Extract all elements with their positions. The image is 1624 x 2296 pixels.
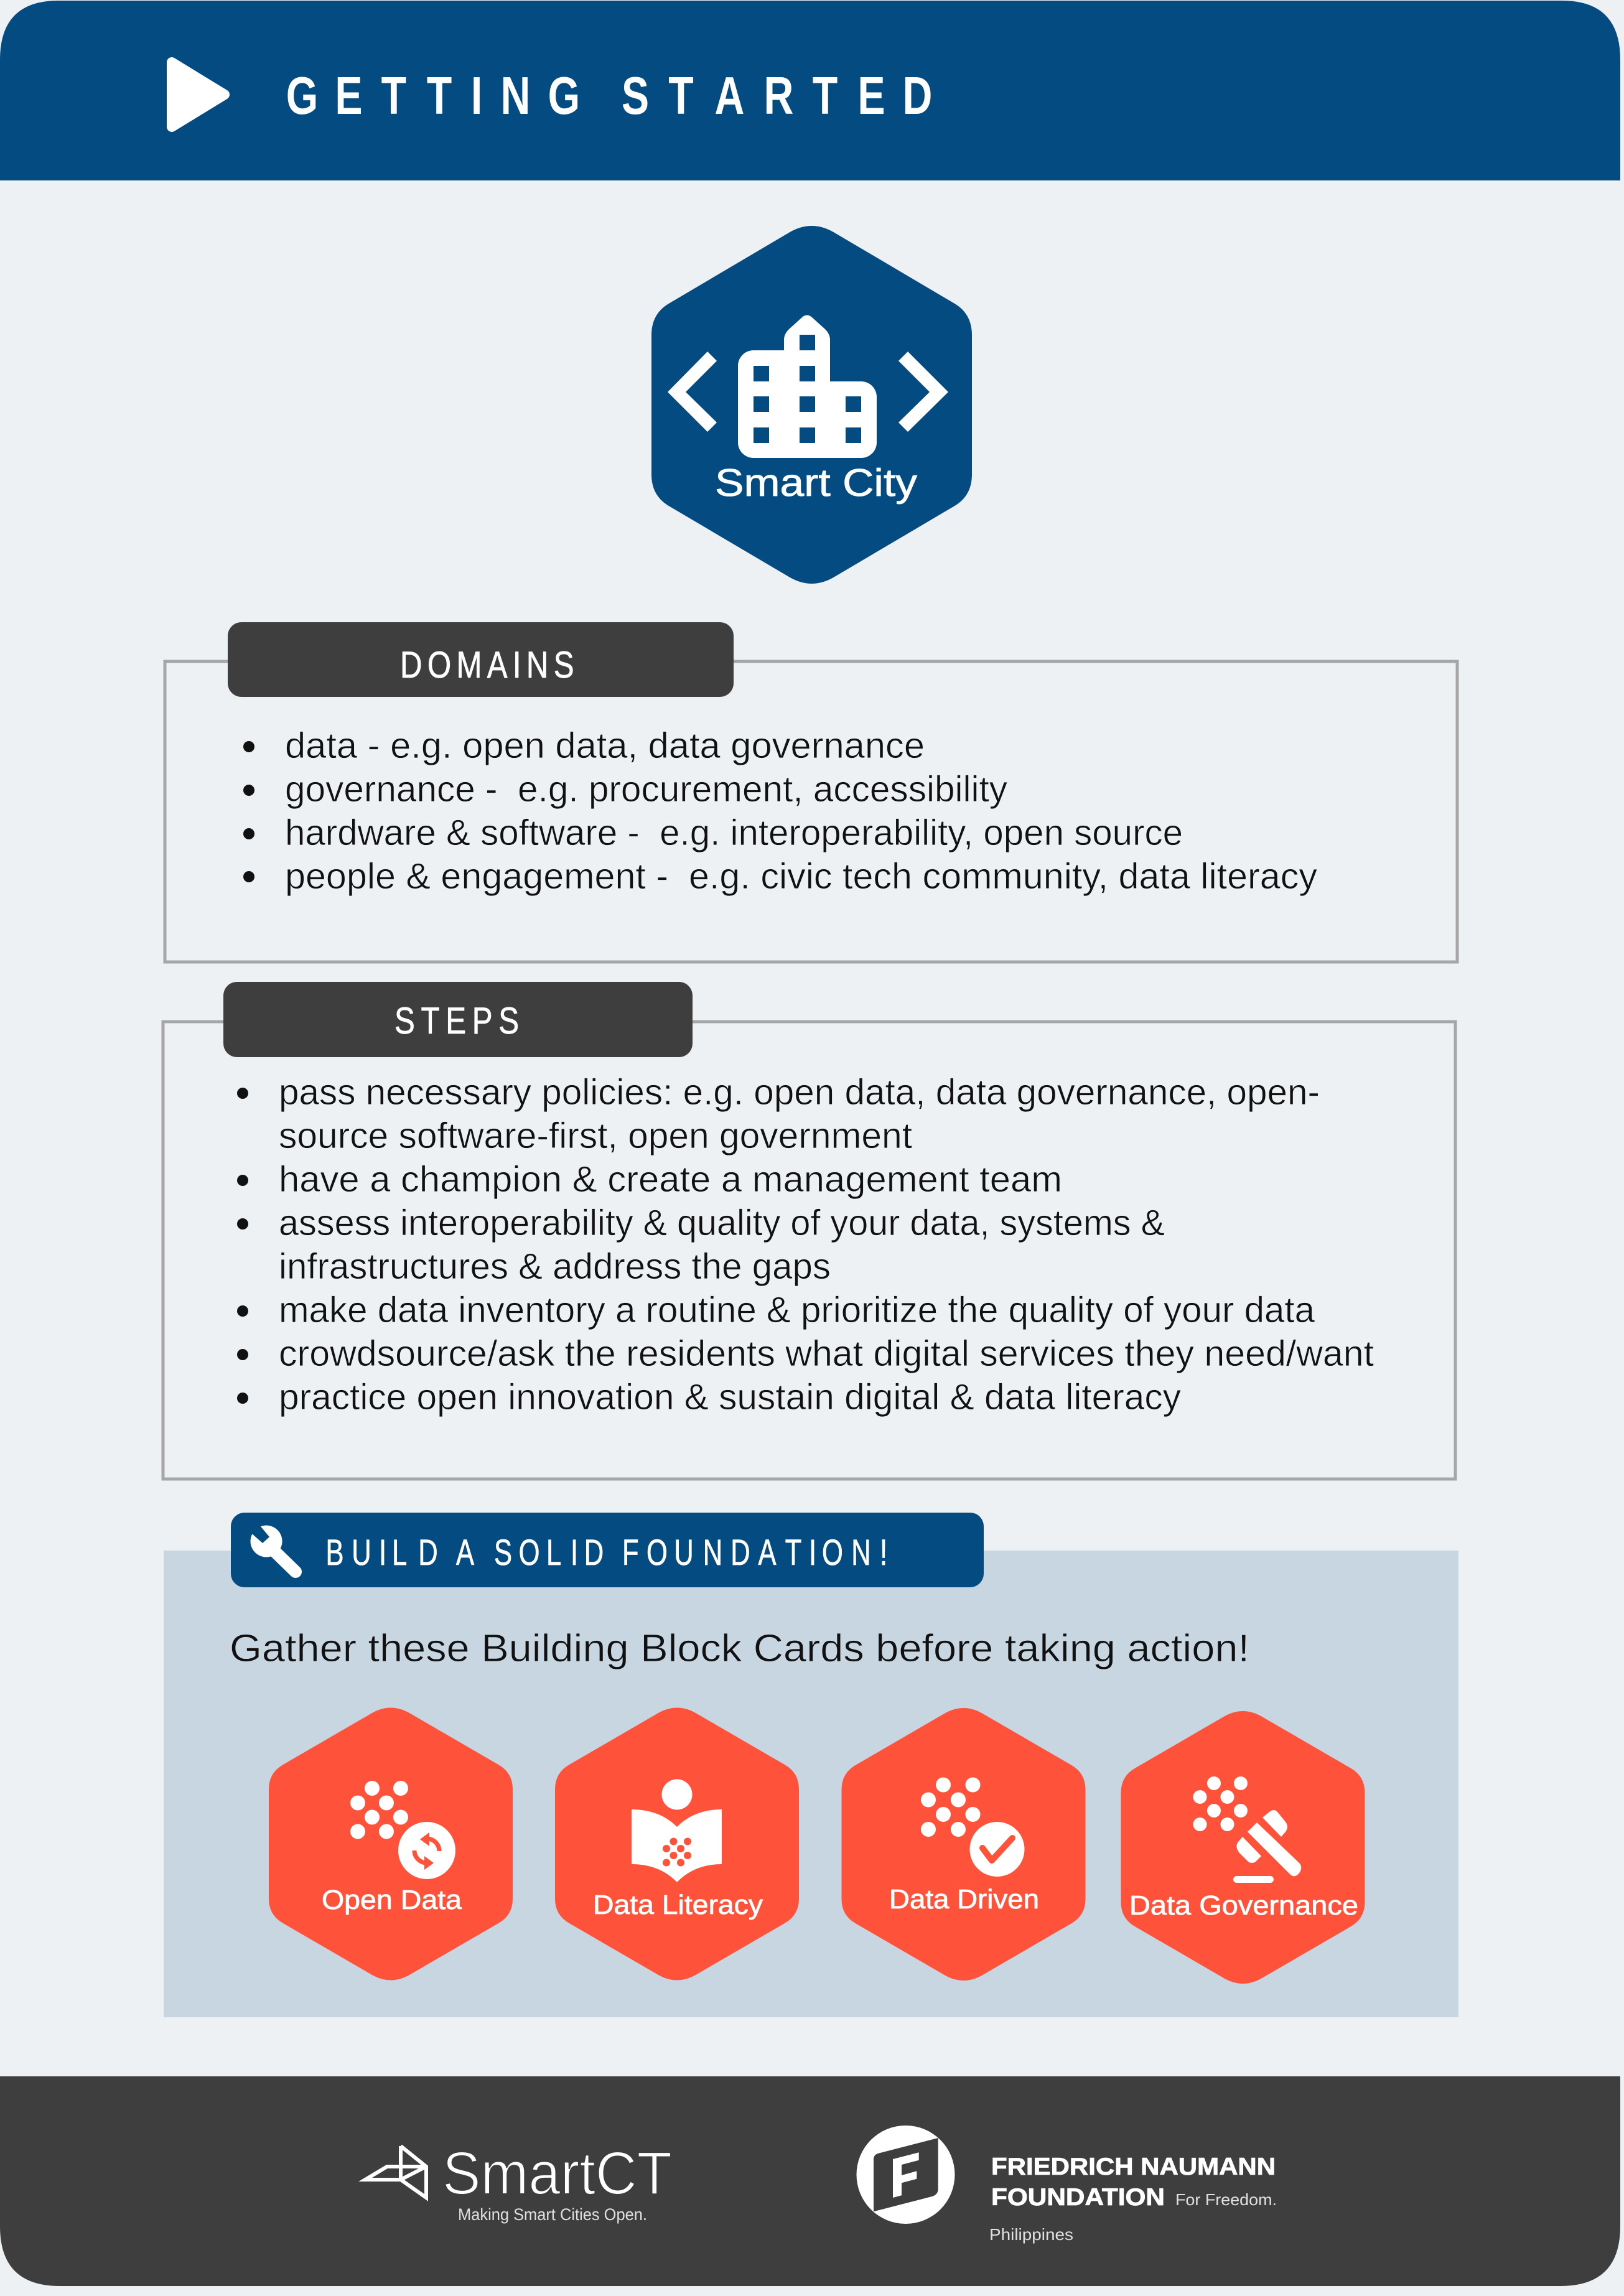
steps list: crowdsource/ask the residents what digital services they need/want bbox=[279, 1333, 1374, 1374]
heading: steps bbox=[223, 982, 693, 1057]
badge label: Smart City bbox=[715, 462, 917, 505]
icon: data dots with gavel bbox=[1193, 1776, 1301, 1883]
steps list bbox=[237, 1072, 1374, 1417]
icon: FNF roundel bbox=[856, 2126, 954, 2224]
card: data literacy bbox=[555, 1707, 799, 1980]
icon: wrench bbox=[250, 1524, 296, 1572]
steps list: pass necessary policies: e.g. open data, data governance, open- bbox=[279, 1072, 1320, 1113]
icon: data dots with check bbox=[921, 1777, 1024, 1877]
steps list: practice open innovation & sustain digital & data literacy bbox=[279, 1377, 1181, 1417]
domains list: people & engagement - e.g. civic tech community, data literacy bbox=[285, 856, 1317, 897]
header banner bbox=[0, 1, 1620, 180]
card: open data bbox=[269, 1707, 513, 1980]
domains list: data - e.g. open data, data governance bbox=[285, 726, 925, 766]
badge: Smart City hexagon bbox=[651, 226, 972, 584]
title: GETTING STARTED bbox=[286, 67, 932, 126]
logo: Friedrich Naumann Foundation: Philippines bbox=[989, 2225, 1073, 2244]
card: data driven bbox=[841, 1708, 1085, 1981]
logo: Friedrich Naumann Foundation: FRIEDRICH NAUMANN bbox=[991, 2154, 1276, 2180]
icon: reader with book bbox=[632, 1780, 722, 1882]
domains list: governance - e.g. procurement, accessibility bbox=[285, 769, 1007, 810]
heading: build a solid foundation bbox=[231, 1513, 984, 1587]
heading: build a solid foundation: BUILD A SOLID FOUNDATION! bbox=[326, 1533, 887, 1572]
heading: steps: STEPS bbox=[394, 999, 519, 1042]
logo: Friedrich Naumann Foundation: For Freedom. bbox=[1175, 2190, 1277, 2209]
icon: data dots with sync bbox=[350, 1781, 455, 1879]
card label: Open Data bbox=[322, 1885, 462, 1915]
footer band bbox=[0, 2076, 1620, 2286]
intro text: Gather these Building Block Cards before taking action! bbox=[230, 1627, 1249, 1670]
icon: left code chevron bbox=[668, 352, 717, 432]
steps list: assess interoperability & quality of your data, systems & bbox=[279, 1203, 1165, 1243]
card label: Data Driven bbox=[889, 1884, 1039, 1915]
card label: Data Literacy bbox=[593, 1890, 763, 1920]
heading: domains bbox=[228, 622, 734, 697]
steps list: have a champion & create a management team bbox=[279, 1159, 1062, 1200]
logo: SmartCT: Making Smart Cities Open. bbox=[458, 2205, 647, 2224]
logo: Friedrich Naumann Foundation bbox=[856, 2126, 1277, 2244]
steps list: infrastructures & address the gaps bbox=[279, 1246, 831, 1287]
card label: Data Governance bbox=[1129, 1890, 1358, 1921]
domains list bbox=[243, 726, 1317, 897]
logo: Friedrich Naumann Foundation: FOUNDATION bbox=[991, 2184, 1165, 2211]
panel: build a solid foundation bbox=[164, 1513, 1458, 2017]
icon: building bbox=[738, 315, 877, 458]
logo: SmartCT: SmartCT bbox=[442, 2139, 672, 2207]
icon: right code chevron bbox=[898, 352, 948, 432]
panel: domains bbox=[165, 622, 1457, 962]
heading: domains: DOMAINS bbox=[400, 643, 574, 686]
steps list: source software-first, open government bbox=[279, 1116, 912, 1156]
steps list: make data inventory a routine & prioritize the quality of your data bbox=[279, 1290, 1315, 1330]
domains list: hardware & software - e.g. interoperability, open source bbox=[285, 813, 1183, 853]
icon: play arrow bbox=[172, 62, 225, 127]
panel: steps bbox=[163, 982, 1455, 1479]
logo: SmartCT bbox=[365, 2139, 672, 2224]
icon: SmartCT mark bbox=[365, 2146, 426, 2198]
card: data governance bbox=[1121, 1711, 1365, 1984]
